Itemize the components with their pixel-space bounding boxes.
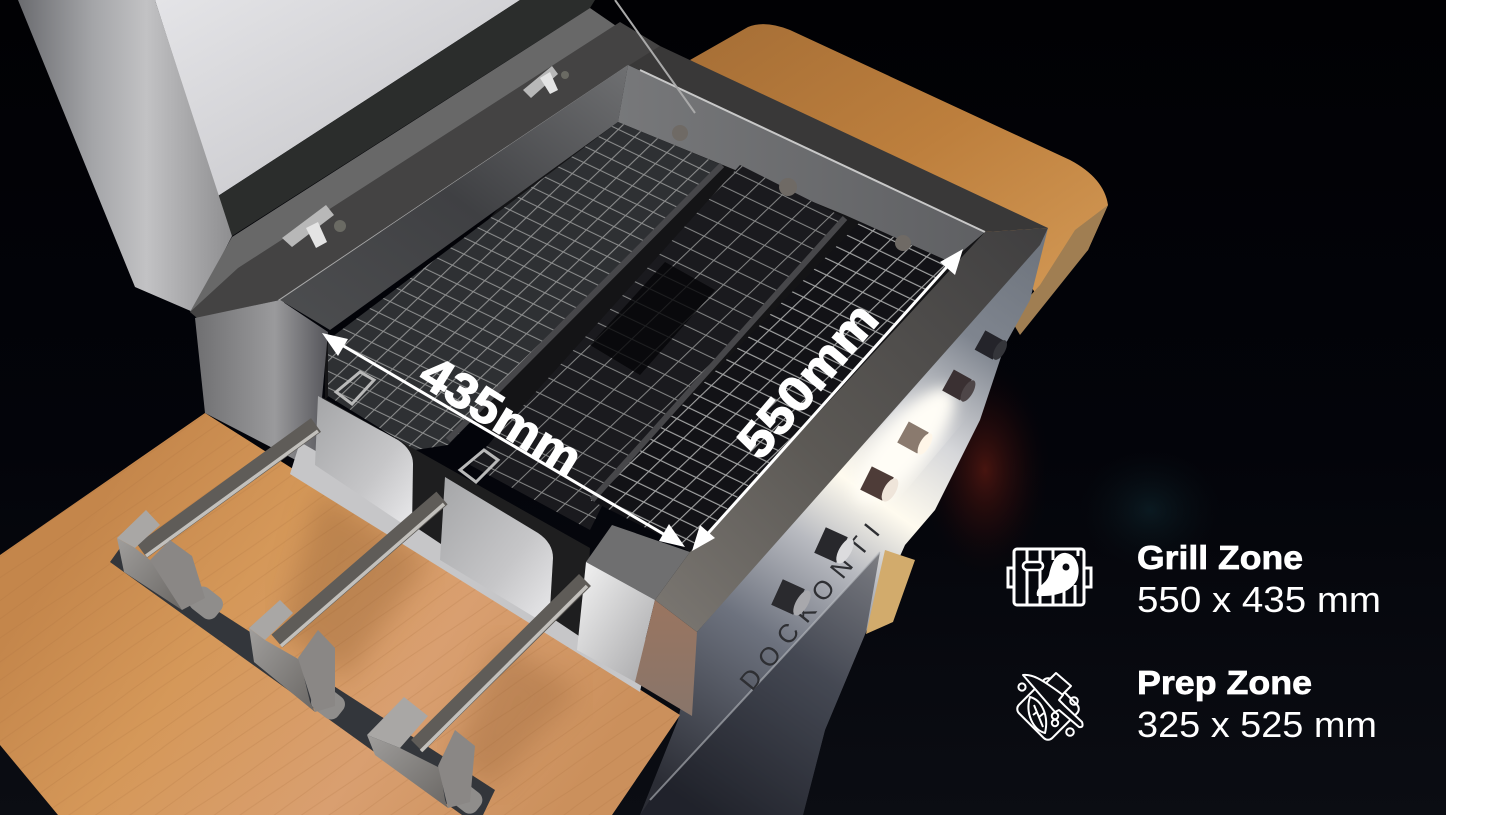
plate 2 xyxy=(440,477,553,626)
darker lower panel xyxy=(640,552,880,815)
plate 1 xyxy=(315,396,413,530)
lid xyxy=(18,0,595,312)
value: grill dimensions: 550 x 435 mm xyxy=(1137,579,1381,620)
back wood shelf xyxy=(690,24,1108,335)
heading: Grill Zone: Grill Zone xyxy=(1137,539,1303,576)
near corner block top xyxy=(586,525,690,600)
icon: cutting board with knife xyxy=(1015,673,1083,742)
brand lettering: DOCKONTI xyxy=(733,518,886,696)
latch 1 xyxy=(336,372,374,404)
bracket 3 xyxy=(367,697,486,815)
knob 5 xyxy=(820,536,857,566)
lid inner panel xyxy=(155,0,520,196)
heading: Prep Zone: Prep Zone xyxy=(1137,664,1312,701)
knob 6 xyxy=(777,588,814,618)
value: prep dimensions: 325 x 525 mm xyxy=(1137,704,1377,745)
label: 435mm: 435mm xyxy=(410,346,591,487)
icon: grill with meat xyxy=(1008,549,1091,605)
dimension arrow: 550mm xyxy=(692,249,963,551)
rod 3 xyxy=(417,580,587,751)
copper reflection face xyxy=(635,600,697,716)
hinge rail xyxy=(190,8,660,318)
grill basket middle xyxy=(470,165,845,530)
latch 2 xyxy=(460,450,498,482)
bracket 2 xyxy=(249,600,349,723)
red light glow xyxy=(920,360,1050,580)
dark floor reflection xyxy=(590,262,715,375)
knob 4 xyxy=(866,476,902,504)
teal light glow xyxy=(1080,450,1220,570)
white right margin xyxy=(1446,0,1500,815)
lid dark recess xyxy=(218,0,595,236)
side panel fold line xyxy=(650,552,880,800)
roller wheels xyxy=(672,125,911,251)
back rim xyxy=(622,30,1048,232)
basket dividers xyxy=(448,165,845,500)
rod 2 xyxy=(277,498,444,646)
stay wire xyxy=(615,0,695,113)
knob 2 xyxy=(948,378,978,404)
hinge 2 xyxy=(523,66,569,98)
text block: Prep Zone xyxy=(1137,664,1377,745)
cavity back wall xyxy=(618,65,985,262)
grill basket right xyxy=(590,222,950,550)
label: 550mm: 550mm xyxy=(727,293,889,469)
box front face xyxy=(195,300,697,716)
front rim xyxy=(655,228,1048,632)
bracket 1 xyxy=(117,510,227,623)
knob 3 xyxy=(903,431,935,457)
hinge 1 xyxy=(282,205,346,248)
knob 1 xyxy=(980,338,1010,362)
dimension arrow: 435mm xyxy=(322,333,685,547)
wooden handle xyxy=(866,550,915,634)
board shadow xyxy=(280,490,430,680)
lid frame edge xyxy=(18,0,232,312)
near corner block face xyxy=(577,562,655,682)
board shadow near bracket xyxy=(450,640,580,790)
grill basket left xyxy=(328,122,722,450)
rod 1 xyxy=(142,425,318,556)
cavity long wall xyxy=(280,65,628,330)
text block: Grill Zone xyxy=(1137,539,1381,620)
front wooden board xyxy=(0,413,680,815)
handle rail xyxy=(110,548,495,815)
grill cavity xyxy=(280,0,985,552)
grill side panel with knobs xyxy=(640,228,1048,815)
lower wall xyxy=(290,442,650,692)
